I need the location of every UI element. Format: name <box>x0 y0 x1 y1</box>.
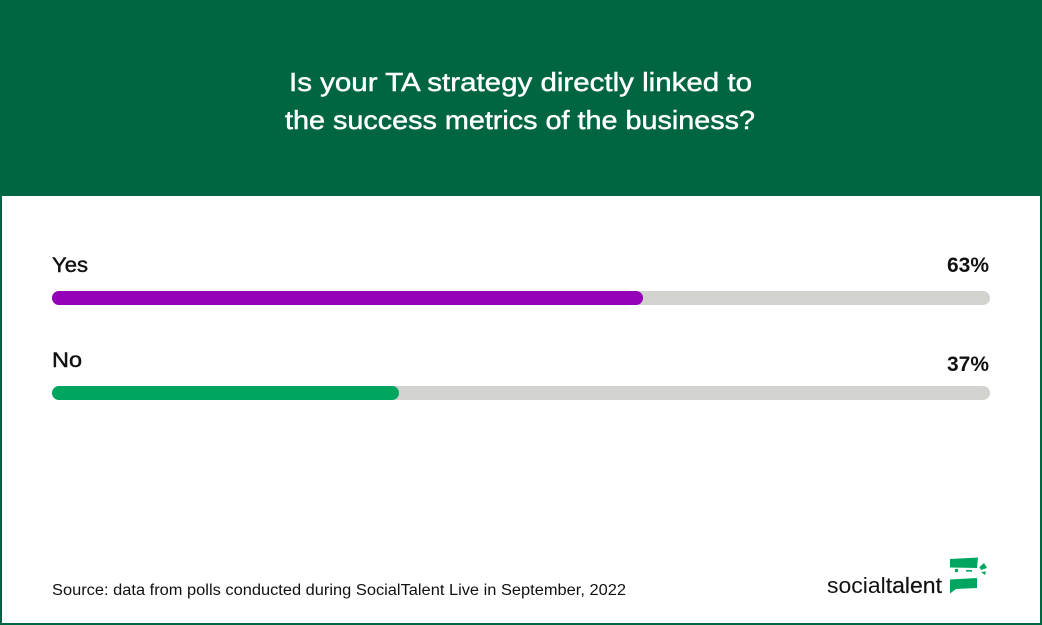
source note: Source: data from polls conducted during SocialTalent Live in September, 2022 <box>52 582 626 599</box>
header panel <box>0 0 1042 196</box>
fill <box>52 291 643 305</box>
label: Yes: Yes <box>52 253 88 277</box>
wordmark: socialtalent <box>827 573 942 598</box>
track <box>52 291 990 305</box>
title: Is your TA strategy directly linked to <box>289 67 752 97</box>
bar row: No 37% <box>52 348 990 400</box>
bar row: Yes 63% <box>52 253 990 305</box>
value: 63%: 63% <box>947 253 989 277</box>
fill <box>52 386 399 400</box>
title <box>285 67 755 135</box>
logo: socialtalent <box>827 558 987 598</box>
value: 37%: 37% <box>947 352 989 376</box>
label: No: No <box>52 348 82 372</box>
icon: speech flag <box>950 558 987 594</box>
track <box>52 386 990 400</box>
title: the success metrics of the business? <box>285 105 755 135</box>
